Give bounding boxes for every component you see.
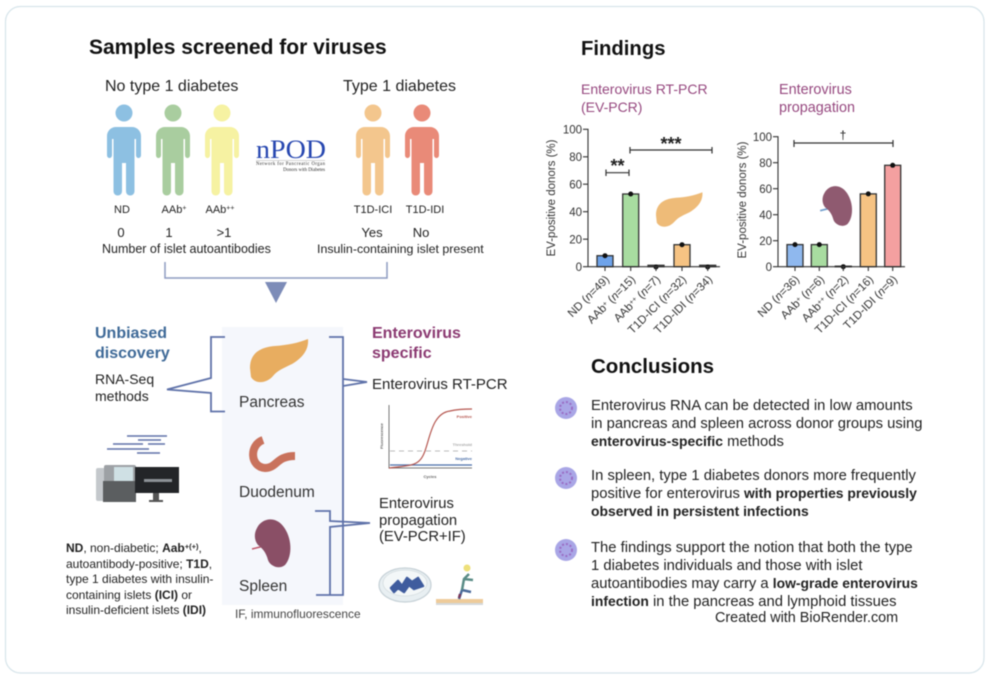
group labels: +	[182, 205, 186, 212]
x labels: +	[795, 296, 803, 304]
organ panel background	[222, 327, 343, 605]
x labels: ++	[816, 296, 827, 307]
x labels: n=6)	[802, 274, 827, 299]
bracket: enterovirus RT-PCR	[316, 337, 367, 595]
group labels: AAb	[162, 204, 182, 216]
y ticks: 60	[759, 184, 772, 196]
icon: culture dish	[379, 568, 431, 602]
heading: findings: Findings	[581, 38, 666, 60]
group labels: ++	[226, 205, 234, 212]
y ticks: 0	[766, 262, 772, 274]
y ticks: 0	[576, 262, 582, 274]
x labels: (	[633, 290, 647, 304]
chart: PCR amplification curve	[379, 405, 473, 479]
heading: unbiased discovery: Unbiased	[95, 325, 167, 342]
icon: T1D-IDI person	[405, 104, 439, 196]
text: enterovirus propagation: (EV-PCR+IF)	[379, 529, 466, 545]
bracket: enterovirus propagation	[315, 511, 370, 595]
group values: Yes	[361, 225, 383, 240]
heading: unbiased discovery: discovery	[95, 345, 170, 362]
y ticks: 40	[759, 210, 772, 222]
data points	[792, 163, 895, 269]
y ticks: 20	[569, 234, 582, 246]
y axis label: EV-positive donors (%)	[546, 139, 558, 256]
x labels: T1D-IDI (n=34)	[652, 274, 715, 337]
chart: PCR amplification curve: Positive	[457, 414, 473, 419]
x labels: n=15)	[609, 274, 638, 303]
text: conclusion 3: low-grade enterovirus	[773, 575, 918, 591]
panel: enterovirus specific	[372, 325, 508, 605]
chart: PCR amplification curve: Cycles	[424, 474, 437, 479]
bars	[787, 165, 901, 267]
significance: ***: ***	[660, 134, 682, 154]
icon: sequence reads	[107, 436, 167, 453]
group labels: ND	[114, 204, 130, 216]
chart: PCR amplification curve: Fluorescence	[379, 422, 384, 449]
footnote: abbreviations: autoantibody-positive;	[66, 557, 186, 571]
group labels: AAb	[206, 204, 226, 216]
panel: findings	[546, 38, 905, 337]
y ticks: 80	[569, 152, 582, 164]
text: RNA-Seq methods: methods	[95, 388, 149, 404]
footnote: abbreviations: +(+)	[185, 542, 199, 551]
x labels: T1D-IDI (n=9)	[842, 274, 900, 332]
connector bracket	[165, 262, 387, 278]
chart heading: enterovirus propagation: propagation	[779, 100, 855, 116]
bars	[597, 194, 716, 267]
x labels: (	[604, 295, 617, 308]
chart heading: enterovirus RT-PCR: (EV-PCR)	[581, 99, 642, 115]
caption: insulin-containing islet present: Insulin-containing islet present	[317, 242, 484, 256]
text: RNA-Seq methods: RNA-Seq	[95, 371, 154, 387]
group labels: T1D-IDI	[406, 204, 444, 216]
y ticks: 100	[753, 132, 772, 144]
logo: nPOD: Donors with Diabetes	[283, 168, 325, 173]
x labels: T1D-ICI (n=32)	[626, 274, 689, 337]
text: enterovirus RT-PCR: Enterovirus RT-PCR	[372, 376, 508, 393]
text: conclusion 2: In spleen, type 1 diabetes donors more frequently	[591, 468, 917, 484]
text: conclusion 2: observed in persistent infections	[591, 503, 809, 519]
arrow: down	[265, 282, 287, 303]
group values: 0	[117, 225, 125, 240]
x labels: AAb	[779, 298, 803, 322]
bar chart: EV-PCR	[546, 124, 720, 337]
text: conclusion 2: positive for enterovirus	[591, 486, 744, 502]
heading: no type 1 diabetes: No type 1 diabetes	[105, 78, 238, 95]
label: spleen: Spleen	[239, 578, 287, 595]
icon: T1D-ICI person	[356, 104, 390, 196]
panel: unbiased discovery	[66, 325, 217, 617]
footnote: abbreviations: ,	[198, 541, 202, 555]
footnote: abbreviations: T1D,	[186, 557, 212, 571]
group labels	[114, 204, 444, 216]
text: conclusion 3: 1 diabetes individuals and those with islet	[591, 558, 862, 574]
x labels: (	[797, 290, 811, 304]
x labels: n=7)	[638, 274, 663, 299]
footnote: abbreviations: , non-diabetic; Aab	[83, 541, 185, 555]
logo: nPOD: Network for Pancreatic Organ	[256, 162, 326, 167]
text: conclusion 3: in the pancreas and lymphoid tissues	[649, 594, 896, 610]
title: samples screened: Samples screened for viruses	[89, 36, 387, 59]
logo: nPOD: nPOD	[256, 135, 326, 164]
y ticks: 20	[759, 236, 772, 248]
x labels	[756, 274, 900, 337]
x labels: AAb	[800, 301, 824, 325]
panel: organs	[167, 327, 370, 621]
y ticks: 60	[569, 180, 582, 192]
icon: duodenum	[253, 440, 295, 468]
chart heading: enterovirus RT-PCR: Enterovirus RT-PCR	[581, 81, 708, 97]
icon: virus bullet 1	[555, 397, 577, 419]
significance: ***	[630, 134, 712, 154]
group values: 1	[165, 225, 173, 240]
heading: conclusions: Conclusions	[591, 355, 714, 378]
data points	[602, 192, 710, 270]
y axis label: EV-positive donors (%)	[737, 141, 749, 258]
footnote: abbreviations: type 1 diabetes with insulin-	[66, 572, 213, 586]
caption: number of islet autoantibodies: Number of islet autoantibodies	[102, 242, 271, 256]
footnote: abbreviations: (IDI)	[183, 603, 206, 617]
y ticks: 100	[563, 124, 582, 136]
y ticks	[563, 124, 582, 274]
x labels: ND (n=36)	[756, 274, 802, 320]
label: pancreas: Pancreas	[239, 394, 305, 411]
icon: AAb+ person	[156, 104, 190, 196]
x labels: T1D-ICI (n=16)	[813, 274, 876, 337]
icon: virus bullet 3	[555, 539, 577, 561]
y ticks: 80	[759, 158, 772, 170]
axes	[583, 129, 720, 271]
text: conclusion 2: with properties previously	[743, 485, 917, 501]
y ticks: 40	[569, 207, 582, 219]
panel: conclusions	[555, 355, 927, 626]
icon: spleen	[252, 519, 290, 567]
significance: **	[606, 156, 629, 176]
icon: pancreas inset	[656, 192, 702, 227]
text: conclusion 3: infection	[591, 593, 649, 609]
footnote: abbreviations: containing islets	[66, 588, 155, 602]
axes	[773, 137, 905, 271]
credit: Created with BioRender.com	[715, 610, 898, 626]
x labels: AAb	[612, 301, 636, 325]
text: conclusion 3: The findings support the notion that both the type	[591, 540, 913, 556]
heading: enterovirus specific: Enterovirus	[372, 325, 461, 342]
text: enterovirus propagation: Enterovirus	[379, 496, 454, 512]
x labels: +	[601, 300, 609, 308]
icon: pancreas	[250, 339, 308, 382]
text: conclusion 1: methods	[723, 434, 784, 450]
chart heading: enterovirus propagation: Enterovirus	[779, 82, 852, 98]
label: duodenum: Duodenum	[239, 484, 315, 501]
text: conclusion 1: enterovirus-specific	[591, 433, 723, 449]
icon: antibody assay	[436, 564, 483, 605]
chart: PCR amplification curve: Negative	[455, 456, 473, 461]
x labels: ND (n=49)	[566, 274, 612, 320]
chart: PCR amplification curve: Threshold	[453, 442, 473, 447]
x labels: n=2)	[826, 274, 851, 299]
heading: enterovirus specific: specific	[372, 345, 432, 362]
group values	[117, 225, 429, 240]
text: conclusion 1: Enterovirus RNA can be detected in low amounts	[591, 398, 913, 414]
text: conclusion 3: autoantibodies may carry a	[591, 576, 773, 592]
group values: No	[413, 225, 429, 240]
footnote: abbreviations: insulin-deficient islets	[66, 603, 183, 617]
group labels: T1D-ICI	[354, 204, 392, 216]
significance: dagger: †	[840, 128, 846, 142]
panel: samples screened	[89, 36, 484, 303]
y ticks	[753, 132, 772, 274]
icon: AAb++ person	[205, 104, 239, 196]
x labels: (	[821, 290, 835, 304]
icon: spleen inset	[820, 186, 852, 226]
footnote: abbreviations: ND	[66, 541, 84, 555]
bar chart: enterovirus propagation	[737, 128, 905, 337]
x labels: AAb	[585, 303, 609, 326]
x labels	[566, 274, 715, 337]
group values: >1	[217, 225, 231, 240]
bracket: RNA-Seq	[167, 337, 225, 412]
icon: virus bullet 2	[555, 467, 577, 489]
x labels: ++	[628, 296, 639, 307]
significance: dagger	[794, 128, 893, 147]
text: enterovirus propagation: propagation	[379, 513, 457, 529]
text: conclusion 1: in pancreas and spleen across donor groups using	[591, 416, 922, 432]
note: immunofluorescence: IF, immunofluorescence	[235, 607, 361, 621]
significance: **: **	[610, 156, 625, 176]
icon: sequencer	[96, 465, 179, 502]
footnote: abbreviations: (ICI) or	[155, 588, 192, 602]
icon: ND person	[107, 104, 141, 196]
heading: type 1 diabetes: Type 1 diabetes	[343, 78, 456, 95]
